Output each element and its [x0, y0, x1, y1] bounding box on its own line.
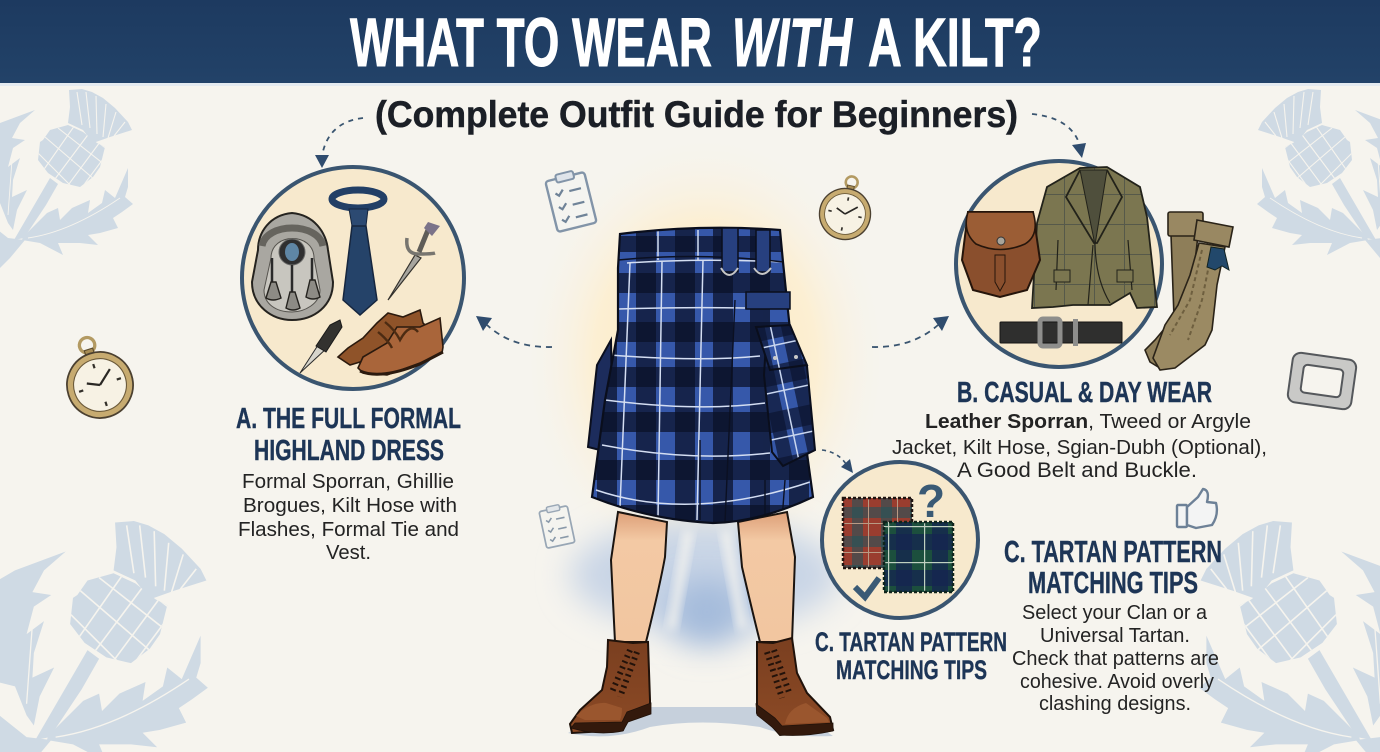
icon: kilt pin dagger [388, 222, 440, 300]
left boot [570, 640, 651, 733]
circle B [956, 161, 1162, 367]
decorative thistle top left [0, 89, 133, 272]
kilt wearer [570, 225, 833, 736]
section A text [236, 403, 461, 564]
decorative thistle bottom right [1199, 521, 1380, 752]
kilt outline [592, 228, 813, 523]
icon: pocket watch top [815, 171, 878, 244]
belt straps and D-rings [721, 228, 790, 309]
icon: thumbs up [1177, 489, 1217, 528]
body C: Universal Tartan. [1040, 625, 1190, 647]
left leg [611, 512, 667, 642]
icon: tweed jacket [1032, 167, 1157, 308]
left side pocket [588, 340, 612, 450]
body A: Brogues, Kilt Hose with [243, 495, 457, 517]
heading B: B. CASUAL & DAY WEAR [957, 377, 1212, 409]
central glow [520, 130, 890, 646]
red swatch [843, 498, 912, 568]
title text: WITH [732, 4, 853, 81]
arrow from kilt to B [872, 316, 949, 347]
decorative thistle bottom left [0, 521, 208, 752]
title text: WHAT TO WEAR [350, 4, 712, 81]
panel A: formal items [242, 167, 464, 389]
icon: clipboard lower [538, 503, 575, 548]
title banner [0, 0, 1380, 86]
body A: Vest. [326, 542, 371, 564]
icon: ghillie brogues [338, 310, 443, 375]
body A [238, 471, 459, 564]
arrow from kilt to C [822, 450, 853, 473]
section B text [892, 377, 1267, 482]
body A: Formal Sporran, Ghillie [242, 471, 454, 493]
panel C: tartan swatches [822, 462, 978, 618]
section C label under circle: MATCHING TIPS [836, 655, 987, 685]
heading A: A. THE FULL FORMAL [236, 403, 461, 435]
icon: sgian dubh [300, 320, 342, 373]
icon: belt buckle [1287, 352, 1357, 410]
body C: clashing designs. [1039, 693, 1191, 715]
icon: clipboard top [544, 168, 597, 232]
body B: A Good Belt and Buckle. [957, 458, 1197, 482]
heading C [1004, 534, 1222, 600]
subtitle: (Complete Outfit Guide for Beginners) [375, 94, 1018, 135]
section C label under circle: C. TARTAN PATTERN [815, 627, 1007, 657]
icon: leather sporran [962, 212, 1040, 297]
section C label under circle [815, 627, 1007, 685]
body C [1012, 602, 1219, 715]
green swatch [884, 522, 953, 592]
decorative thistle top right [1257, 89, 1380, 272]
body B: Leather Sporran , Tweed or Argyle [925, 411, 1251, 433]
icon: kilt hose [1145, 212, 1233, 370]
circle A [242, 167, 464, 389]
kilt body tartan [593, 228, 812, 522]
body C: Select your Clan or a [1022, 602, 1208, 624]
question mark: ? [917, 475, 945, 527]
arrow from kilt to A [476, 316, 552, 347]
body B: Jacket, Kilt Hose, Sgian-Dubh (Optional), [892, 437, 1267, 459]
body A: Flashes, Formal Tie and [238, 519, 459, 541]
arrow to B from subtitle [1032, 114, 1086, 158]
icon: pocket watch left [53, 328, 142, 427]
icon: formal tie [332, 190, 384, 315]
right boot [756, 638, 833, 736]
cargo pocket [756, 325, 815, 466]
icon: belt and buckle [1000, 319, 1122, 346]
right leg [738, 512, 795, 642]
heading C: MATCHING TIPS [1028, 565, 1198, 600]
body C: Check that patterns are [1012, 648, 1219, 670]
heading C: C. TARTAN PATTERN [1004, 534, 1222, 569]
title text: A KILT? [868, 4, 1042, 81]
icon: hose flash [1207, 247, 1229, 270]
icon: formal sporran [252, 213, 333, 320]
circle C [822, 462, 978, 618]
body C: cohesive. Avoid overly [1020, 671, 1214, 693]
heading A [236, 403, 461, 467]
check mark [855, 578, 879, 597]
panel B: casual items [956, 161, 1233, 370]
section C text [1004, 534, 1222, 715]
body B [892, 411, 1267, 482]
arrow to A from subtitle [315, 118, 363, 168]
heading A: HIGHLAND DRESS [254, 435, 444, 467]
ground shadow [568, 707, 833, 736]
